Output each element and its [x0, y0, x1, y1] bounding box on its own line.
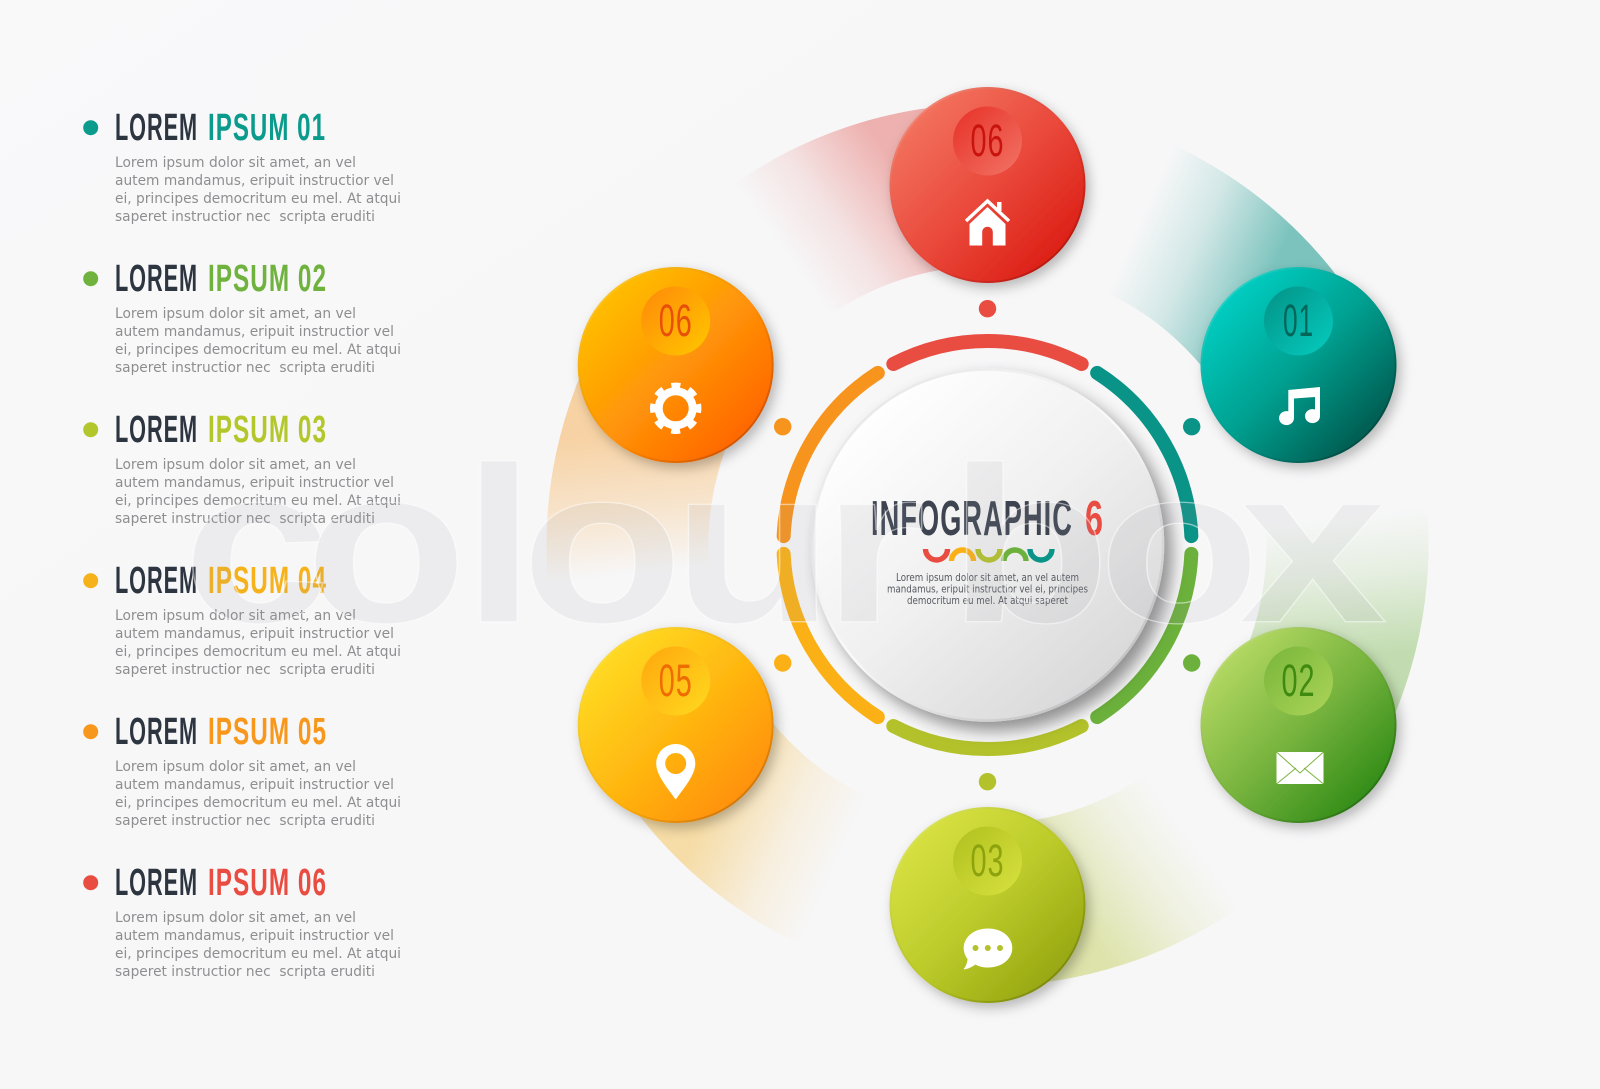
legend item 06: Lorem ipsum dolor sit amet, an vel	[115, 910, 356, 926]
icon: speech bubble	[964, 928, 1012, 970]
legend item 01	[83, 107, 401, 225]
circle: 01 teal music: 01	[1283, 295, 1314, 346]
legend item 01: autem mandamus, eripuit instructior vel	[115, 173, 394, 189]
centre description	[887, 572, 1088, 607]
legend item 01: LOREM	[115, 107, 198, 149]
circle: 01 teal music	[1200, 267, 1396, 463]
legend item 06	[83, 862, 401, 980]
circle: 03 lime chat: 03	[970, 835, 1004, 886]
circle: 06 red home	[890, 87, 1086, 283]
legend item 02: LOREM	[115, 258, 198, 300]
legend item 04: saperet instructior nec scripta eruditi	[115, 662, 375, 678]
legend item 02: autem mandamus, eripuit instructior vel	[115, 324, 394, 340]
watermark: colourbox	[182, 421, 1387, 669]
icon: gear	[653, 386, 698, 431]
icon: envelope	[1276, 752, 1324, 784]
legend item 01: Lorem ipsum dolor sit amet, an vel	[115, 155, 356, 171]
legend item 03: Lorem ipsum dolor sit amet, an vel	[115, 457, 356, 473]
circle: 06 orange gear	[578, 267, 774, 463]
fading swoosh bands	[448, 13, 1527, 1077]
legend item 02: IPSUM 02	[208, 258, 327, 300]
legend item 01: saperet instructior nec scripta eruditi	[115, 209, 375, 225]
circle: 06 red home: 06	[970, 115, 1004, 166]
circle: 02 green mail	[1200, 627, 1396, 823]
circle: 02 green mail: 02	[1282, 655, 1316, 706]
circle: 05 amber pin: 05	[659, 655, 693, 706]
legend item 03: LOREM	[115, 409, 198, 451]
legend item 02: Lorem ipsum dolor sit amet, an vel	[115, 306, 356, 322]
legend item 04: autem mandamus, eripuit instructior vel	[115, 626, 394, 642]
legend item 06: IPSUM 06	[208, 862, 327, 904]
wave decoration	[926, 549, 1052, 561]
legend item 04	[83, 560, 401, 678]
legend item 04: ei, principes democritum eu mel. At atqui	[115, 644, 401, 660]
legend item 04: IPSUM 04	[208, 560, 327, 602]
legend item 05: saperet instructior nec scripta eruditi	[115, 813, 375, 829]
legend item 03: IPSUM 03	[208, 409, 327, 451]
icon: music note	[1279, 387, 1320, 425]
legend item 05: ei, principes democritum eu mel. At atqui	[115, 795, 401, 811]
legend item 06: autem mandamus, eripuit instructior vel	[115, 928, 394, 944]
icon: map pin	[656, 744, 695, 800]
legend item 03: autem mandamus, eripuit instructior vel	[115, 475, 394, 491]
centre disc	[812, 370, 1163, 720]
legend item 02: saperet instructior nec scripta eruditi	[115, 360, 375, 376]
legend item 05: LOREM	[115, 711, 198, 753]
legend item 04: Lorem ipsum dolor sit amet, an vel	[115, 608, 356, 624]
legend item 01: IPSUM 01	[208, 107, 326, 149]
legend item 05: Lorem ipsum dolor sit amet, an vel	[115, 759, 356, 775]
legend item 05: autem mandamus, eripuit instructior vel	[115, 777, 394, 793]
legend item 05	[83, 711, 401, 829]
legend list	[83, 107, 401, 980]
circle: 05 amber pin	[578, 627, 774, 823]
circle: 03 lime chat	[890, 807, 1086, 1003]
legend item 02	[83, 258, 401, 376]
legend item 03: ei, principes democritum eu mel. At atqui	[115, 493, 401, 509]
legend item 06: saperet instructior nec scripta eruditi	[115, 964, 375, 980]
centre title number: 6	[1085, 491, 1103, 546]
legend item 06: ei, principes democritum eu mel. At atqui	[115, 946, 401, 962]
icon: home	[966, 201, 1009, 246]
legend item 02: ei, principes democritum eu mel. At atqui	[115, 342, 401, 358]
segmented ring around centre	[764, 341, 1211, 749]
legend item 03	[83, 409, 401, 527]
legend item 06: LOREM	[115, 862, 198, 904]
circle: 06 orange gear: 06	[659, 295, 693, 346]
legend item 01: ei, principes democritum eu mel. At atqui	[115, 191, 401, 207]
legend item 04: LOREM	[115, 560, 198, 602]
legend item 05: IPSUM 05	[208, 711, 327, 753]
centre description: Lorem ipsum dolor sit amet, an vel autem	[896, 572, 1079, 584]
connector dots	[774, 300, 1200, 790]
centre description: democritum eu mel. At atqui saperet	[907, 595, 1068, 607]
legend item 03: saperet instructior nec scripta eruditi	[115, 511, 375, 527]
centre title: INFOGRAPHIC	[871, 491, 1073, 546]
centre description: mandamus, eripuit instructior vel ei, principes	[887, 584, 1088, 596]
